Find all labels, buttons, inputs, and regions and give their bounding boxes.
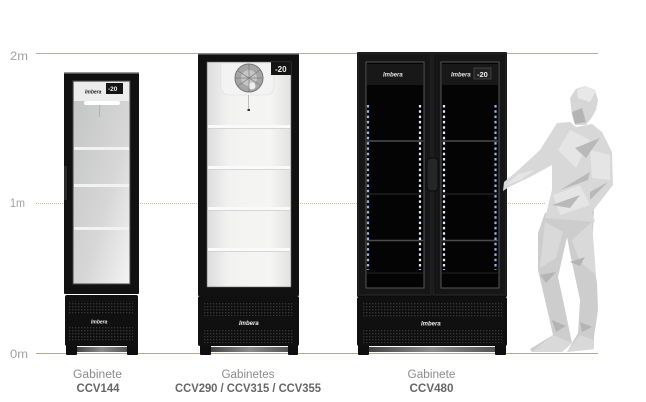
base with grille: Imbera bbox=[239, 321, 259, 327]
caption: CCV290 / CCV315 / CCV355 bbox=[175, 369, 322, 395]
caption: CCV144: CCV144 bbox=[76, 383, 120, 395]
display bbox=[271, 62, 291, 75]
scale labels bbox=[10, 51, 28, 361]
cabinet: CCV290 / CCV315 / CCV355 bbox=[198, 53, 299, 355]
caption: CCV480: Gabinete bbox=[408, 369, 456, 381]
scale labels: 2m bbox=[10, 51, 28, 63]
door handles bbox=[427, 158, 438, 191]
right door: -20 bbox=[477, 70, 488, 79]
handle bbox=[64, 166, 67, 200]
feet bbox=[358, 344, 506, 355]
LED strips bbox=[444, 105, 496, 270]
body bbox=[357, 52, 507, 297]
feet bbox=[66, 344, 138, 355]
display: -20 bbox=[275, 65, 287, 74]
right door bbox=[433, 53, 506, 295]
glass interior bbox=[207, 62, 291, 287]
evaporator with fan bbox=[221, 63, 274, 111]
caption: CCV144 bbox=[73, 369, 122, 395]
body and door bbox=[64, 72, 139, 294]
feet bbox=[200, 344, 298, 355]
shelves bbox=[208, 125, 290, 251]
scale labels: 0m bbox=[10, 349, 28, 361]
torso and arms bbox=[503, 122, 613, 222]
base with grille bbox=[357, 297, 507, 346]
person silhouette bbox=[503, 86, 613, 352]
LED strips bbox=[368, 105, 420, 270]
base with grille: Imbera bbox=[421, 322, 441, 328]
base with grille: Imbera bbox=[91, 320, 108, 326]
right door: Imbera bbox=[451, 72, 471, 78]
legs bbox=[530, 210, 598, 352]
caption: CCV144: Gabinete bbox=[73, 369, 122, 381]
caption: CCV290 / CCV315 / CCV355: Gabinetes bbox=[222, 369, 275, 381]
caption: CCV290 / CCV315 / CCV355: CCV290 / CCV315 / CCV355 bbox=[175, 383, 322, 395]
header with logo and display: -20 bbox=[108, 86, 118, 93]
cabinet: CCV144 bbox=[64, 72, 139, 355]
header with logo and display bbox=[74, 82, 129, 117]
glass interior bbox=[73, 81, 130, 284]
scale labels: 1m bbox=[10, 198, 25, 210]
head bbox=[570, 86, 598, 125]
left door: Imbera bbox=[383, 72, 403, 78]
base with grille bbox=[65, 295, 138, 346]
body and door bbox=[198, 53, 299, 296]
caption: CCV480 bbox=[408, 369, 456, 395]
scale lines bbox=[36, 54, 598, 354]
cabinet: CCV480 bbox=[357, 52, 507, 355]
header with logo and display: Imbera bbox=[85, 90, 102, 96]
shelves bbox=[74, 147, 129, 230]
left door bbox=[358, 53, 431, 295]
caption: CCV480: CCV480 bbox=[410, 383, 454, 395]
base with grille bbox=[198, 296, 299, 346]
